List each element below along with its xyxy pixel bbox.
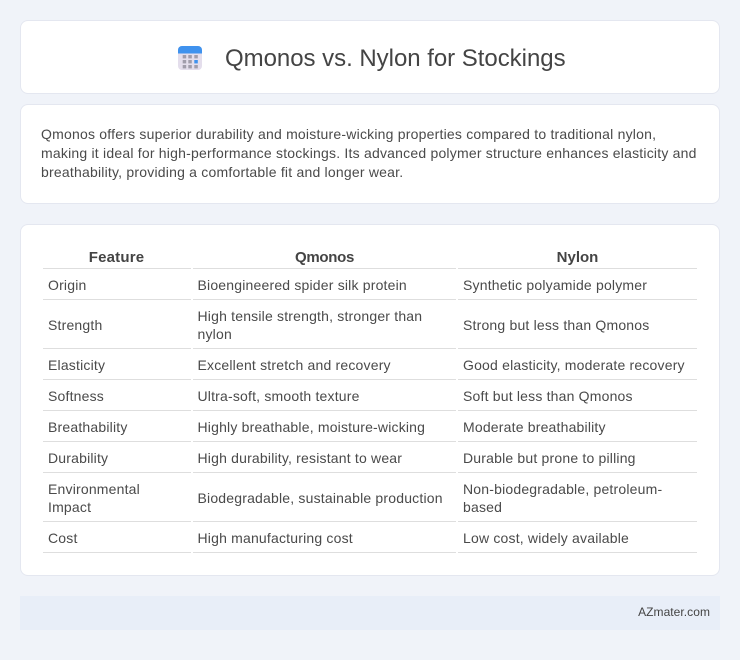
row: elasticity: Elasticity: [48, 357, 105, 373]
row: cost: Low cost, widely available: [463, 530, 629, 546]
row: strength: Strong but less than Qmonos: [463, 317, 649, 333]
summary text: [41, 126, 697, 180]
row: origin: [48, 277, 647, 293]
title: Qmonos vs. Nylon for Stockings: [225, 45, 566, 72]
table header: Feature: [89, 249, 144, 266]
row: breathability: Moderate breathability: [463, 419, 606, 435]
summary text: making it ideal for high-performance stockings. Its advanced polymer structure enhances elasticity and: [41, 145, 697, 161]
row: strength: Strength: [48, 317, 102, 333]
row: durability: Durable but prone to pilling: [463, 450, 636, 466]
row: cost: High manufacturing cost: [198, 530, 353, 546]
panel: title card: [20, 20, 720, 94]
row: strength: High tensile strength, stronger than: [198, 308, 422, 324]
row: durability: High durability, resistant to wear: [198, 450, 402, 466]
row: elasticity: Good elasticity, moderate recovery: [463, 357, 685, 373]
comparison table: [43, 249, 697, 553]
panel: comparison table card: [20, 224, 720, 576]
icon: calendar: [178, 46, 202, 70]
row: durability: [48, 450, 636, 466]
panel: summary card: [20, 104, 720, 204]
row: cost: [48, 530, 629, 546]
footer bar: [20, 596, 720, 630]
row: breathability: Breathability: [48, 419, 128, 435]
row: softness: [48, 388, 633, 404]
footer credit: AZmater.com: [638, 605, 710, 619]
row: softness: Ultra-soft, smooth texture: [198, 388, 360, 404]
row: origin: Origin: [48, 277, 86, 293]
table header: Nylon: [557, 249, 598, 266]
row: elasticity: Excellent stretch and recovery: [198, 357, 391, 373]
row: breathability: Highly breathable, moisture-wicking: [198, 419, 425, 435]
table header: Qmonos: [295, 249, 354, 266]
row: softness: Softness: [48, 388, 104, 404]
row: environmental impact: Non-biodegradable, petroleum-: [463, 481, 662, 497]
row: durability: Durability: [48, 450, 108, 466]
summary text: breathability, providing a comfortable fit and longer wear.: [41, 164, 403, 180]
row: origin: Synthetic polyamide polymer: [463, 277, 647, 293]
row: elasticity: [48, 357, 685, 373]
table header: [89, 249, 598, 266]
row: breathability: [48, 419, 606, 435]
row: strength: [48, 308, 649, 342]
row: strength: nylon: [198, 326, 232, 342]
row: softness: Soft but less than Qmonos: [463, 388, 633, 404]
row: environmental impact: Impact: [48, 499, 91, 515]
row: environmental impact: [48, 481, 662, 515]
row: cost: Cost: [48, 530, 78, 546]
row: environmental impact: based: [463, 499, 502, 515]
summary text: Qmonos offers superior durability and moisture-wicking properties compared to traditional nylon,: [41, 126, 656, 142]
row: environmental impact: Biodegradable, sustainable production: [198, 490, 443, 506]
row: origin: Bioengineered spider silk protein: [198, 277, 407, 293]
row: environmental impact: Environmental: [48, 481, 140, 497]
